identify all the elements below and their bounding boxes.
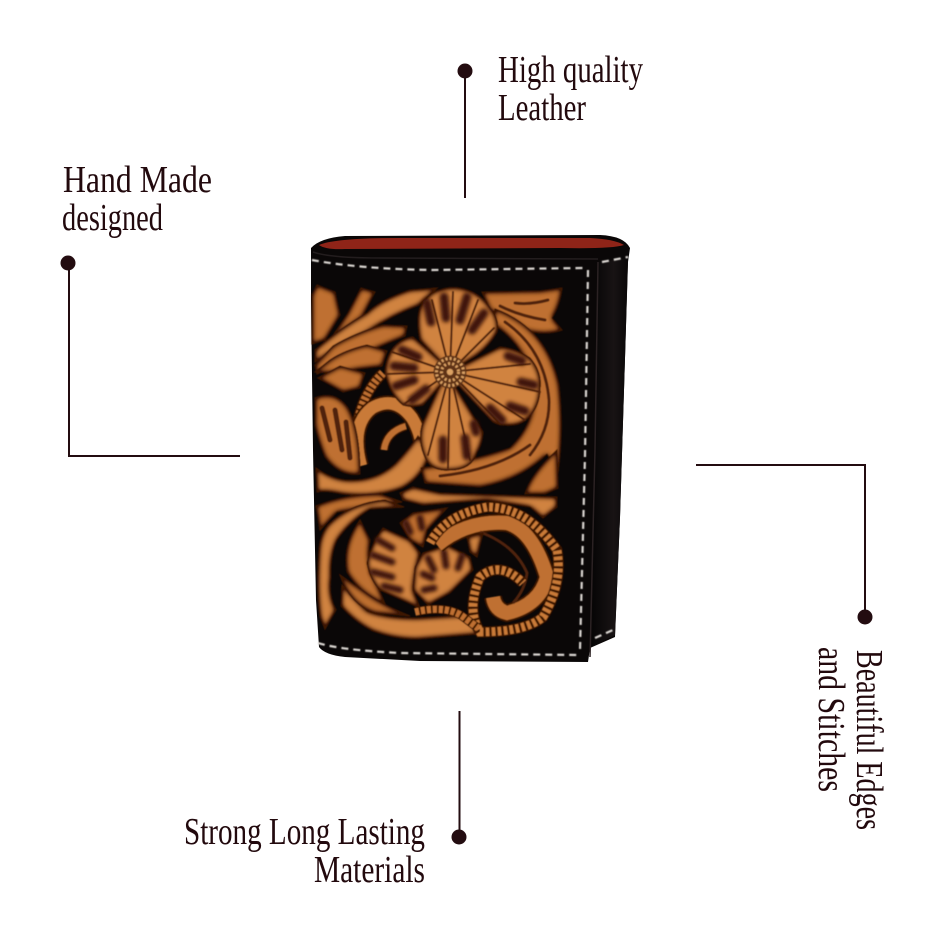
tooling: shell shading	[373, 518, 462, 590]
tooling: flower petal lines	[386, 292, 540, 468]
tooling: lower shell flowers	[367, 508, 473, 608]
callout: beautiful edges and stitches: and Stitches	[810, 647, 852, 792]
tooling: beaded spiral	[415, 507, 558, 632]
callout: beautiful edges and stitches: Beautiful Edges	[848, 650, 890, 830]
wallet fold line	[590, 262, 598, 657]
callout: hand made designed: Hand Made	[63, 159, 212, 201]
wallet red lining	[319, 238, 624, 249]
callout: high quality leather	[458, 49, 643, 198]
tooling: lower-right spiral leaves	[437, 523, 547, 613]
tooling: flower petal shading	[394, 297, 534, 459]
callout: beautiful edges and stitches	[696, 465, 890, 830]
tooling: beaded stem and left scroll	[357, 373, 421, 466]
callout: strong long lasting materials	[184, 711, 466, 891]
callout: hand made designed	[60, 159, 240, 456]
tooling: lower-left sweeping leaves	[316, 494, 479, 639]
callout: strong long lasting materials: Strong Long Lasting	[184, 811, 425, 853]
tooling: lower curve under scroll	[316, 436, 430, 495]
tooling: flower petals	[385, 288, 540, 470]
wallet body	[311, 235, 630, 662]
callout: high quality leather: High quality	[498, 49, 643, 91]
tooling: left small blossom	[315, 396, 360, 474]
tooling: centre band	[400, 487, 557, 518]
tooling: orange triangle	[467, 533, 483, 557]
callout: hand made designed: designed	[62, 197, 163, 239]
wallet illustration	[311, 235, 630, 662]
tooling: top-left leaves	[312, 285, 437, 392]
callout: high quality leather: Leather	[498, 87, 586, 129]
tooling: right sweeping arc	[421, 309, 561, 487]
tooling: flower centre	[434, 356, 466, 388]
wallet back panel	[592, 258, 628, 646]
floral tooling	[312, 285, 562, 639]
wallet stitching	[312, 257, 628, 655]
callout: strong long lasting materials: Materials	[314, 849, 425, 891]
tooling: right vertical leaf	[525, 450, 558, 494]
tooling: upper-right leaf	[482, 288, 562, 333]
flap top edge	[313, 252, 598, 259]
